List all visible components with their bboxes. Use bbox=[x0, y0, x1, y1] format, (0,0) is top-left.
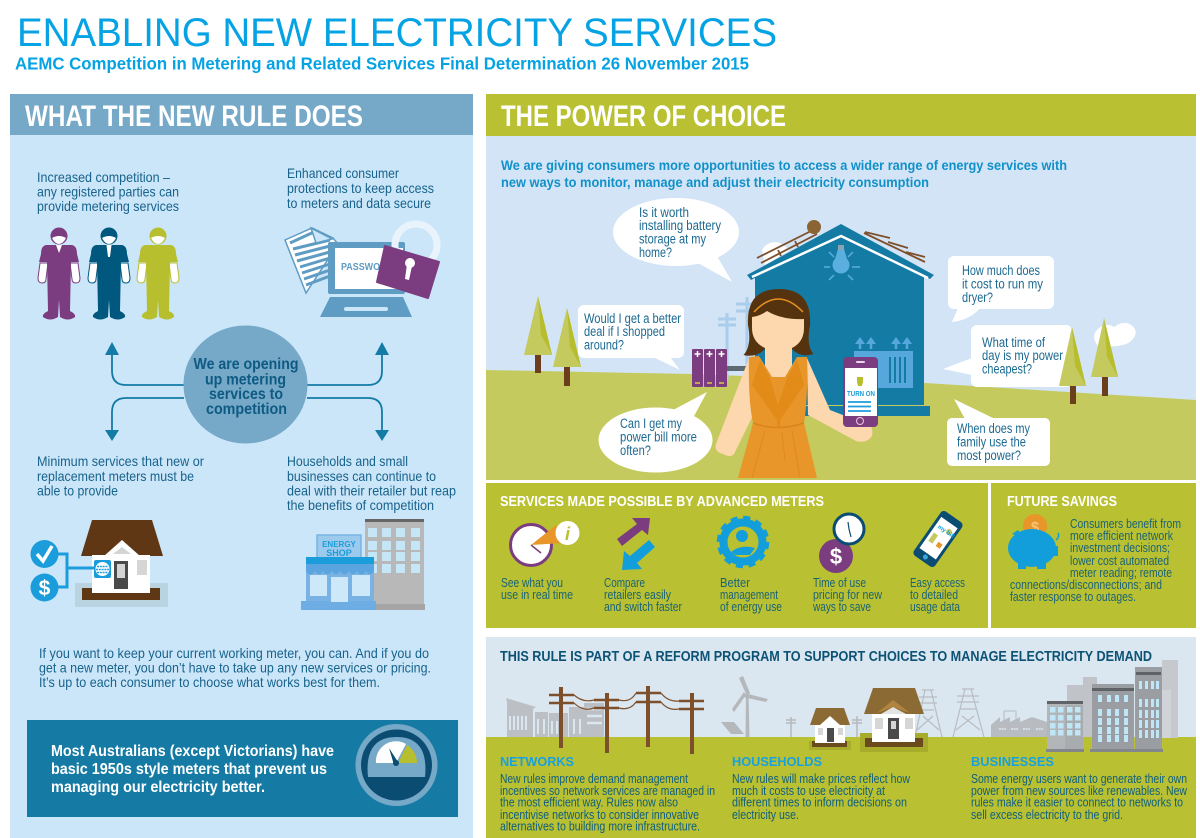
section: businesses: sell excess electricity to the grid. bbox=[971, 808, 1123, 822]
section: businesses bbox=[971, 754, 1188, 822]
speech bubble: cheapest time: cheapest? bbox=[982, 362, 1032, 376]
service: real time: i bbox=[565, 524, 571, 544]
speech bubble: cheapest time bbox=[943, 325, 1072, 387]
section: networks: the most efficient way. Rules now also bbox=[500, 796, 678, 810]
speech bubble: battery storage: home? bbox=[639, 245, 672, 260]
text: enhanced consumer protections: Enhanced consumer bbox=[287, 165, 399, 181]
text: future savings body: faster response to outages. bbox=[1010, 590, 1136, 604]
text: opening up metering: competition bbox=[206, 401, 287, 418]
dress bbox=[738, 356, 817, 478]
service: real time: See what you bbox=[501, 576, 563, 590]
icon: piggy bank: $ bbox=[1031, 519, 1040, 536]
icon: dollar circle: $ bbox=[39, 577, 51, 600]
arms bbox=[716, 358, 768, 456]
text: most australians: Most Australians (except Victorians) have bbox=[51, 743, 334, 760]
text: most australians: basic 1950s style meters that prevent us bbox=[51, 761, 327, 778]
central circle with arrows bbox=[105, 326, 389, 444]
text: most australians bbox=[51, 743, 334, 796]
text: future savings body: meter reading; remote bbox=[1070, 566, 1172, 580]
icon: light bulb bbox=[824, 245, 860, 280]
speech bubble: battery storage: installing battery bbox=[639, 218, 721, 233]
title: ENABLING NEW ELECTRICITY SERVICES bbox=[17, 11, 777, 55]
text: minimum services: replacement meters must be bbox=[37, 468, 194, 484]
section: networks: NETWORKS bbox=[500, 754, 574, 769]
text: keep your current meter bbox=[39, 645, 431, 690]
text: enhanced consumer protections: protections to keep access bbox=[287, 180, 434, 196]
trees: right bbox=[1059, 318, 1118, 404]
service: time of use pricing: ways to save bbox=[812, 600, 871, 614]
service: time of use pricing: pricing for new bbox=[813, 588, 883, 602]
clouds bbox=[762, 242, 1136, 346]
ground bbox=[486, 370, 1196, 480]
panel: future savings bbox=[991, 483, 1196, 628]
service: real time: use in real time bbox=[501, 588, 573, 602]
ground bbox=[486, 737, 1196, 838]
speech bubble: dryer cost bbox=[948, 256, 1054, 322]
arrows bbox=[112, 352, 382, 432]
service: easy access: Easy access bbox=[910, 576, 965, 590]
text: enhanced consumer protections: to meters and data secure bbox=[287, 195, 431, 211]
service: better management bbox=[719, 518, 782, 614]
power poles bbox=[718, 297, 757, 380]
service: better management: Better bbox=[720, 576, 750, 590]
service: time of use pricing bbox=[812, 514, 883, 614]
phone bbox=[843, 357, 878, 427]
factory bbox=[991, 711, 1047, 737]
service: easy access bbox=[910, 509, 965, 614]
text: future savings body bbox=[1010, 517, 1181, 604]
trees: left bbox=[524, 296, 581, 386]
person: purple bbox=[38, 228, 80, 320]
callout: basic 1950s style meters bbox=[27, 720, 458, 817]
service: time of use pricing: $ bbox=[830, 544, 842, 569]
text: future savings body: more efficient network bbox=[1070, 529, 1174, 543]
text: energy shop sign: ENERGY bbox=[322, 540, 357, 549]
solar panels on roof bbox=[757, 229, 925, 263]
panel header bar bbox=[10, 94, 473, 135]
section: households: HOUSEHOLDS bbox=[732, 754, 822, 769]
section: households: New rules will make prices reflect how bbox=[732, 772, 911, 786]
service: time of use pricing: Time of use bbox=[813, 576, 866, 590]
intro text: new ways to monitor, manage and adjust their electricity consumption bbox=[501, 174, 929, 190]
icon: house with meter services bbox=[30, 520, 168, 607]
heading: what the new rule does: WHAT THE NEW RULE DOES bbox=[25, 100, 363, 133]
speech bubble: battery storage: Is it worth bbox=[639, 205, 689, 220]
hair bbox=[744, 289, 814, 356]
icon: laptop, document and padlock: PASSWORD bbox=[341, 262, 393, 273]
text: enhanced consumer protections bbox=[287, 165, 434, 211]
section: networks: New rules improve demand management bbox=[500, 772, 688, 786]
text: keep your current meter: get a new meter, you don’t have to take up any new services or pricing. bbox=[39, 660, 431, 676]
icon: analogue meter gauge bbox=[356, 724, 438, 806]
text: keep your current meter: It’s up to each consumer to choose what works best for them. bbox=[39, 674, 380, 690]
speech bubble: family use: family use the bbox=[957, 434, 1026, 450]
text: increased competition: any registered parties can bbox=[37, 184, 179, 200]
person: navy bbox=[88, 228, 130, 320]
text: opening up metering: We are opening bbox=[194, 356, 298, 373]
text: opening up metering: up metering bbox=[205, 372, 286, 388]
section: networks: incentivise networks to consider innovative bbox=[500, 808, 699, 822]
section: networks bbox=[500, 754, 715, 834]
speech bubble: better deal: deal if I shopped bbox=[584, 324, 665, 339]
speech bubble: battery storage: storage at my bbox=[639, 232, 706, 246]
service: better management: management bbox=[720, 588, 778, 602]
icon: batteries bbox=[692, 349, 750, 387]
subtitle: AEMC Competition in Metering and Related Services Final Determination 26 November 2015 bbox=[15, 54, 749, 74]
panel: services made possible bbox=[486, 483, 988, 628]
section: businesses: BUSINESSES bbox=[971, 754, 1054, 769]
service: compare retailers bbox=[604, 518, 682, 614]
text: households and small businesses: deal with their retailer but reap bbox=[287, 482, 456, 498]
icon: phone bulb bbox=[857, 377, 863, 386]
speech bubble: better deal: Would I get a better bbox=[584, 311, 681, 326]
person: olive bbox=[137, 228, 179, 320]
panel: reform program bbox=[486, 637, 1196, 838]
service: better management: of energy use bbox=[720, 600, 782, 614]
text: future savings body: lower cost automated bbox=[1070, 554, 1169, 568]
transmission towers bbox=[915, 689, 984, 737]
text: most australians: managing our electricity better. bbox=[51, 779, 265, 796]
icon: three people bbox=[38, 228, 179, 320]
service: real time bbox=[501, 521, 580, 602]
speech bubble: cheapest time: day is my power bbox=[982, 348, 1063, 363]
icon: heater bbox=[854, 337, 913, 388]
panel: what the new rule does bbox=[10, 94, 473, 838]
icon: laptop, document and padlock bbox=[285, 224, 439, 317]
heading: services: SERVICES MADE POSSIBLE BY ADVANCED METERS bbox=[500, 493, 824, 510]
text: future savings body: investment decisions; bbox=[1070, 541, 1170, 555]
speech bubble: power bill: often? bbox=[620, 443, 651, 458]
speech bubble: dryer cost: it cost to run my bbox=[962, 276, 1043, 292]
power poles bbox=[549, 686, 704, 754]
text: future savings body: Consumers benefit from bbox=[1070, 517, 1181, 531]
intro text bbox=[501, 157, 1067, 190]
section: networks: alternatives to building more infrastructure. bbox=[500, 820, 700, 834]
text: increased competition: provide metering services bbox=[37, 198, 179, 214]
text: keep your current meter: If you want to keep your current working meter, you can. And if you do bbox=[39, 645, 429, 661]
business buildings bbox=[1046, 660, 1178, 752]
service: easy access: my bill bbox=[936, 524, 956, 540]
text: households and small businesses: the benefits of competition bbox=[287, 497, 434, 513]
service: easy access: to detailed bbox=[910, 588, 958, 602]
grey city skyline bbox=[506, 698, 604, 737]
speech bubble: cheapest time: What time of bbox=[982, 335, 1045, 350]
heading: future savings: FUTURE SAVINGS bbox=[1007, 493, 1117, 510]
section: households bbox=[732, 754, 911, 822]
text: households and small businesses bbox=[287, 453, 456, 513]
text: energy shop sign: SHOP bbox=[326, 548, 352, 558]
panel: the power of choice bbox=[486, 94, 1196, 480]
speech bubble: dryer cost: dryer? bbox=[962, 290, 993, 305]
speech bubble: better deal bbox=[578, 305, 684, 370]
speech bubble: family use: most power? bbox=[957, 448, 1021, 463]
icon: energy shop and office building bbox=[301, 519, 425, 610]
speech bubble: power bill: Can I get my bbox=[620, 416, 682, 431]
speech bubble: family use: When does my bbox=[957, 421, 1030, 436]
text: households and small businesses: businesses can continue to bbox=[287, 468, 436, 484]
large house bbox=[860, 688, 928, 752]
icon: check circle bbox=[30, 540, 58, 568]
section: networks: incentives so network services are managed in bbox=[500, 784, 715, 798]
phone: TURN ON bbox=[847, 389, 875, 398]
text: minimum services bbox=[37, 453, 204, 498]
intro text: We are giving consumers more opportunities to access a wider range of energy services with bbox=[501, 157, 1067, 173]
text: energy shop sign bbox=[322, 540, 357, 558]
speech bubble: power bill: power bill more bbox=[620, 430, 697, 444]
woman with phone bbox=[716, 289, 878, 478]
panel header bar bbox=[486, 94, 1196, 136]
service: compare retailers: Compare bbox=[604, 576, 645, 590]
house bbox=[747, 220, 934, 416]
hairband bbox=[754, 299, 803, 312]
text: opening up metering: services to bbox=[209, 386, 283, 403]
speech bubble: battery storage bbox=[613, 198, 739, 282]
icon: piggy bank bbox=[1008, 514, 1059, 569]
speech bubble: family use bbox=[947, 399, 1050, 466]
section: households: electricity use. bbox=[732, 808, 799, 822]
text: opening up metering bbox=[194, 356, 298, 418]
speech bubble: better deal: around? bbox=[584, 338, 624, 352]
text: increased competition bbox=[37, 169, 179, 214]
speech bubble: dryer cost: How much does bbox=[962, 263, 1040, 278]
text: minimum services: Minimum services that new or bbox=[37, 453, 204, 469]
service: compare retailers: retailers easily bbox=[604, 588, 672, 602]
text: increased competition: Increased competition – bbox=[37, 169, 170, 185]
service: compare retailers: and switch faster bbox=[604, 600, 682, 614]
section: households: much it costs to use electricity at bbox=[732, 784, 885, 798]
text: future savings body: connections/disconnections; and bbox=[1010, 578, 1162, 592]
face and neck bbox=[765, 340, 792, 378]
speech bubble: power bill bbox=[598, 392, 712, 472]
wind turbine and solar panel bbox=[721, 676, 862, 737]
small house bbox=[809, 708, 851, 750]
heading: the power of choice: THE POWER OF CHOICE bbox=[501, 100, 786, 133]
text: households and small businesses: Households and small bbox=[287, 453, 408, 469]
section: households: different times to inform decisions on bbox=[732, 796, 907, 810]
service: easy access: usage data bbox=[910, 600, 960, 614]
text: minimum services: able to provide bbox=[37, 482, 118, 498]
